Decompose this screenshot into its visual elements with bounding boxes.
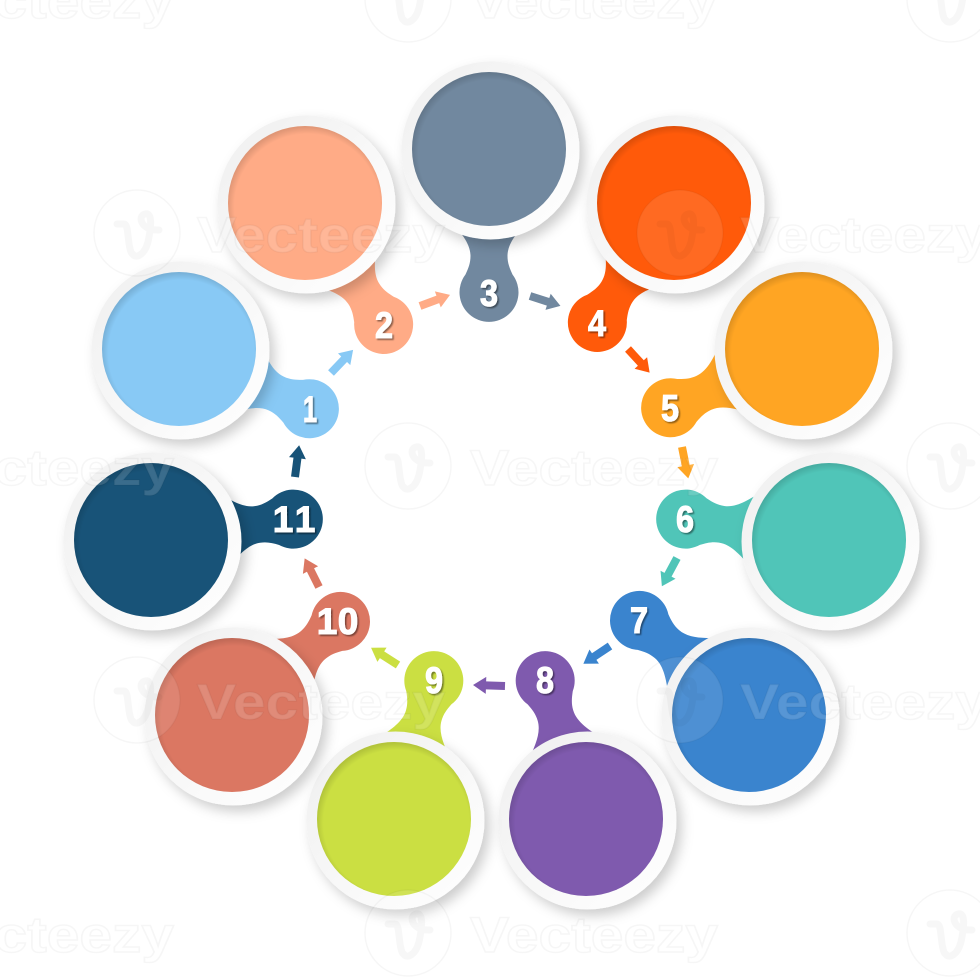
step 6 bbox=[651, 452, 920, 630]
step 1 bbox=[92, 262, 352, 456]
step 8 bbox=[498, 642, 676, 910]
step 2 bbox=[218, 116, 432, 370]
arrow: step 5 to 6 bbox=[674, 445, 697, 480]
step 8: 8 bbox=[536, 660, 554, 701]
step 1: 1 bbox=[303, 389, 317, 430]
arrow: step 9 to 10 bbox=[366, 641, 403, 672]
step 6: 6 bbox=[676, 499, 694, 540]
step 10 bbox=[144, 573, 388, 806]
step 7 bbox=[592, 572, 840, 806]
step 3: 3 bbox=[480, 273, 498, 314]
arrow: step 8 to 9 bbox=[473, 676, 505, 694]
step 9 bbox=[306, 642, 484, 910]
arrow: step 2 to 3 bbox=[417, 287, 453, 314]
watermark: stock image overlay: Vecteezy bbox=[197, 674, 445, 730]
step 11 bbox=[64, 452, 328, 630]
watermark: stock image overlay: Vecteezy bbox=[740, 207, 980, 263]
watermark: stock image overlay: Vecteezy bbox=[470, 907, 718, 963]
watermark: stock image overlay: Vecteezy bbox=[470, 440, 718, 496]
watermark: stock image overlay: Vecteezy bbox=[197, 207, 445, 263]
step 7: 7 bbox=[630, 600, 648, 641]
watermark: stock image overlay: Vecteezy bbox=[740, 674, 980, 730]
step 3 bbox=[402, 62, 580, 322]
step 2: 2 bbox=[375, 305, 393, 346]
arrow: step 7 to 8 bbox=[579, 639, 615, 671]
arrow: step 11 to 1 bbox=[287, 444, 308, 478]
arrow: step 6 to 7 bbox=[654, 554, 684, 590]
arrow: step 1 to 2 bbox=[325, 344, 359, 379]
step 5: 5 bbox=[661, 388, 679, 429]
arrow: step 4 to 5 bbox=[622, 343, 656, 378]
step 11: 11 bbox=[273, 499, 315, 540]
step 4 bbox=[549, 116, 764, 368]
step 5 bbox=[628, 262, 892, 454]
step 10: 10 bbox=[317, 601, 358, 642]
step 4: 4 bbox=[588, 303, 606, 344]
arrow: step 3 to 4 bbox=[527, 288, 563, 314]
arrow: step 10 to 11 bbox=[297, 555, 327, 591]
step 9: 9 bbox=[425, 660, 443, 701]
